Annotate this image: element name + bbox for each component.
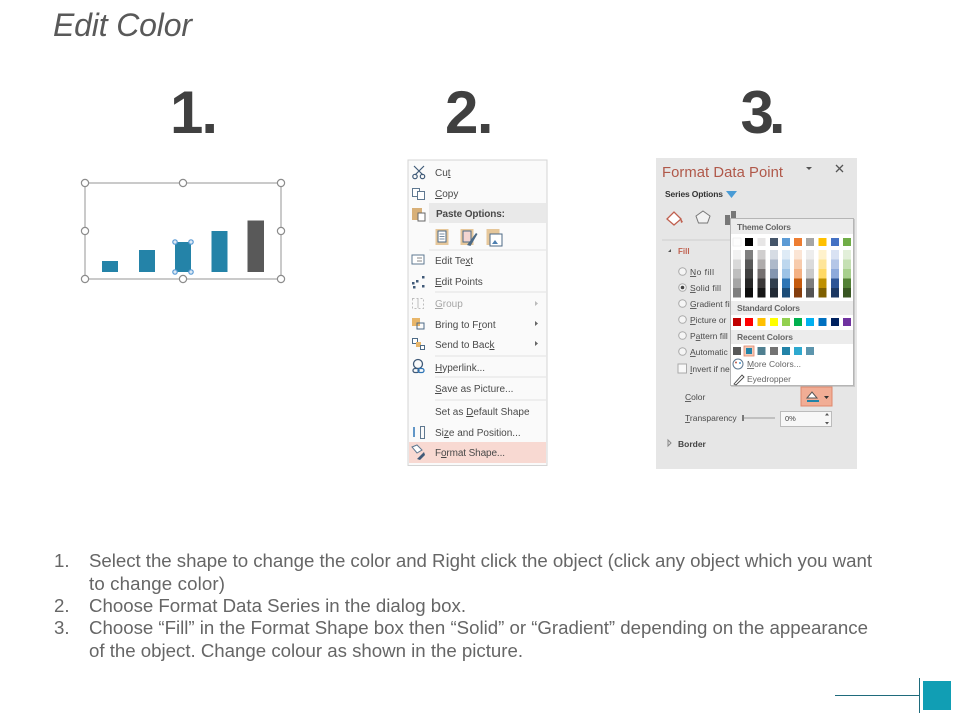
instructions list: 2. xyxy=(54,595,70,616)
icon: group xyxy=(412,298,424,308)
instructions list: of the object. Change colour as shown in the picture. xyxy=(89,640,523,661)
bar chart xyxy=(102,220,264,272)
fill options: Gradient fill xyxy=(690,299,733,309)
icon: scissors xyxy=(413,166,425,179)
fill options: Invert if ne xyxy=(690,364,730,374)
tab icons xyxy=(667,211,736,225)
icon: size and position xyxy=(414,426,424,438)
fill options: Solid fill xyxy=(690,283,721,293)
icon: copy xyxy=(412,188,424,200)
more colours and eyedropper xyxy=(733,359,801,385)
menu labels: Edit Text xyxy=(435,256,473,267)
step number 2: 2. xyxy=(445,79,492,146)
more colours and eyedropper: Eyedropper xyxy=(747,374,791,384)
border section: Border xyxy=(678,439,707,449)
fill options: Picture or xyxy=(690,315,727,325)
submenu arrows xyxy=(535,301,538,346)
instructions list xyxy=(54,550,873,661)
colour picker dropdown xyxy=(730,218,855,387)
menu labels: Size and Position... xyxy=(435,428,521,439)
icons: paste options xyxy=(436,229,502,246)
panel: selected bar chart xyxy=(81,179,285,283)
panel controls xyxy=(806,165,843,172)
icon: bring to front xyxy=(412,318,424,329)
icon: format shape xyxy=(412,445,425,460)
instructions list: Select the shape to change the color and Right click the object (click any object which you want xyxy=(89,550,873,571)
picker headings: Theme Colors xyxy=(737,222,791,232)
step number 3: 3. xyxy=(740,79,782,146)
panel: format data point xyxy=(656,158,857,469)
instructions list: 1. xyxy=(54,550,70,571)
fill options: Pattern fill xyxy=(690,331,728,341)
transparency control xyxy=(685,412,832,426)
recent colours xyxy=(733,346,814,356)
instructions list: 3. xyxy=(54,617,70,638)
fill section heading xyxy=(668,247,690,256)
frame handles xyxy=(81,179,285,283)
menu labels xyxy=(435,168,530,459)
instructions list: Choose “Fill” in the Format Shape box then “Solid” or “Gradient” depending on the appearance xyxy=(89,617,868,638)
icon: hyperlink xyxy=(413,360,424,372)
menu labels: Send to Back xyxy=(435,340,495,351)
fill options xyxy=(678,267,733,374)
icon: edit text xyxy=(412,255,424,264)
menu labels: Edit Points xyxy=(435,277,483,288)
menu labels: Bring to Front xyxy=(435,320,496,331)
standard colours xyxy=(733,318,851,326)
step number 1: 1. xyxy=(170,79,216,146)
menu labels: Group xyxy=(435,299,463,310)
theme colour row xyxy=(733,238,851,246)
picker headings xyxy=(737,222,800,342)
icon: edit points xyxy=(412,276,424,288)
selected bar handles xyxy=(173,240,193,274)
panel: context menu xyxy=(408,160,547,466)
instructions list: Choose Format Data Series in the dialog box. xyxy=(89,595,466,616)
panel heading: Format Data Point xyxy=(662,165,783,181)
menu labels: Format Shape... xyxy=(435,448,505,459)
fill options: No fill xyxy=(690,267,714,277)
more colours and eyedropper: More Colors... xyxy=(747,359,801,369)
transparency control: Transparency xyxy=(685,413,737,423)
series options: Series Options xyxy=(665,189,723,199)
menu labels: Save as Picture... xyxy=(435,384,513,395)
menu labels: Copy xyxy=(435,189,458,200)
color control xyxy=(685,387,832,406)
picker headings: Standard Colors xyxy=(737,303,800,313)
fill options: Automatic xyxy=(690,347,729,357)
theme colour shades xyxy=(733,250,851,298)
menu labels: Paste Options: xyxy=(436,209,505,220)
instructions list: to change color) xyxy=(89,573,225,594)
color control: Color xyxy=(685,392,705,402)
picker headings: Recent Colors xyxy=(737,332,793,342)
transparency control: 0% xyxy=(785,414,796,423)
corner decoration xyxy=(835,678,951,713)
icon: paste xyxy=(412,208,425,221)
menu labels: Cut xyxy=(435,168,451,179)
icon: send to back xyxy=(412,338,424,350)
menu labels: Hyperlink... xyxy=(435,363,485,374)
title: Edit Color xyxy=(53,7,193,43)
fill section heading: Fill xyxy=(678,247,690,256)
menu labels: Set as Default Shape xyxy=(435,407,530,418)
